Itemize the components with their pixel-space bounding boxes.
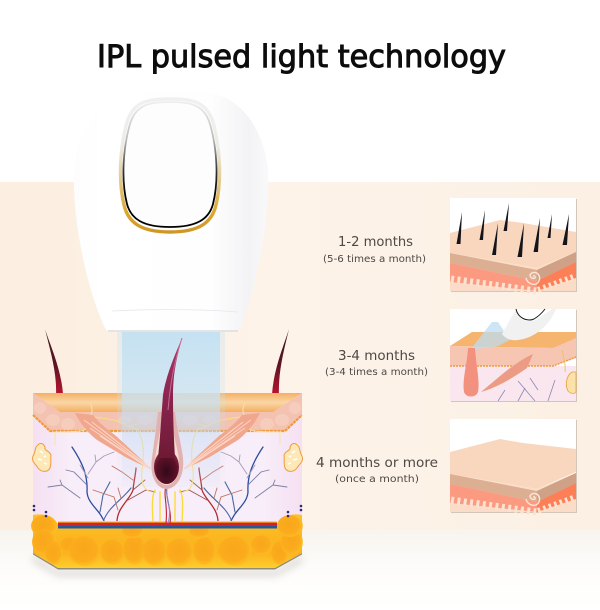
panel: 4 months smooth skin <box>450 419 577 513</box>
dermis <box>450 366 576 401</box>
label: 1-2 months: (5-6 times a month) <box>323 254 426 265</box>
skin cross-section diagram <box>31 329 303 576</box>
fat layer <box>31 514 303 570</box>
label: 4 months or more: (once a month) <box>335 474 419 485</box>
label: 4 months or more: 4 months or more <box>316 455 438 471</box>
light beam <box>117 332 225 487</box>
device: IPL handset <box>74 91 268 332</box>
surface <box>450 332 576 348</box>
dermis layer <box>33 410 302 522</box>
label: 1-2 months <box>323 234 426 265</box>
panel: 1-2 months skin with hair <box>450 198 577 292</box>
central hair follicle <box>151 338 183 489</box>
muscle <box>481 354 533 392</box>
label: 3-4 months <box>325 348 428 378</box>
handset edge <box>502 309 556 340</box>
hair erector muscles <box>75 413 260 469</box>
label: 3-4 months: (3-4 times a month) <box>325 367 428 378</box>
epidermis pink layer <box>33 393 302 431</box>
vessels and glands <box>33 403 160 524</box>
adipose cell <box>566 372 576 393</box>
panel: 3-4 months treatment <box>450 309 577 402</box>
device window with gold trim <box>120 99 220 232</box>
blood vessel band <box>58 486 277 528</box>
label: 4 months or more <box>316 455 438 485</box>
epidermis <box>450 337 576 366</box>
follicle <box>464 348 479 396</box>
title: IPL pulsed light technology <box>97 39 506 75</box>
nerve dots <box>33 505 302 517</box>
outer hairs <box>45 329 289 395</box>
block shadow <box>33 556 302 576</box>
label: 3-4 months: 3-4 months <box>338 348 415 364</box>
vessels <box>498 378 555 401</box>
top surface <box>33 393 302 412</box>
hairs <box>456 203 569 257</box>
label: 1-2 months: 1-2 months <box>338 234 413 250</box>
light cone <box>470 322 510 350</box>
